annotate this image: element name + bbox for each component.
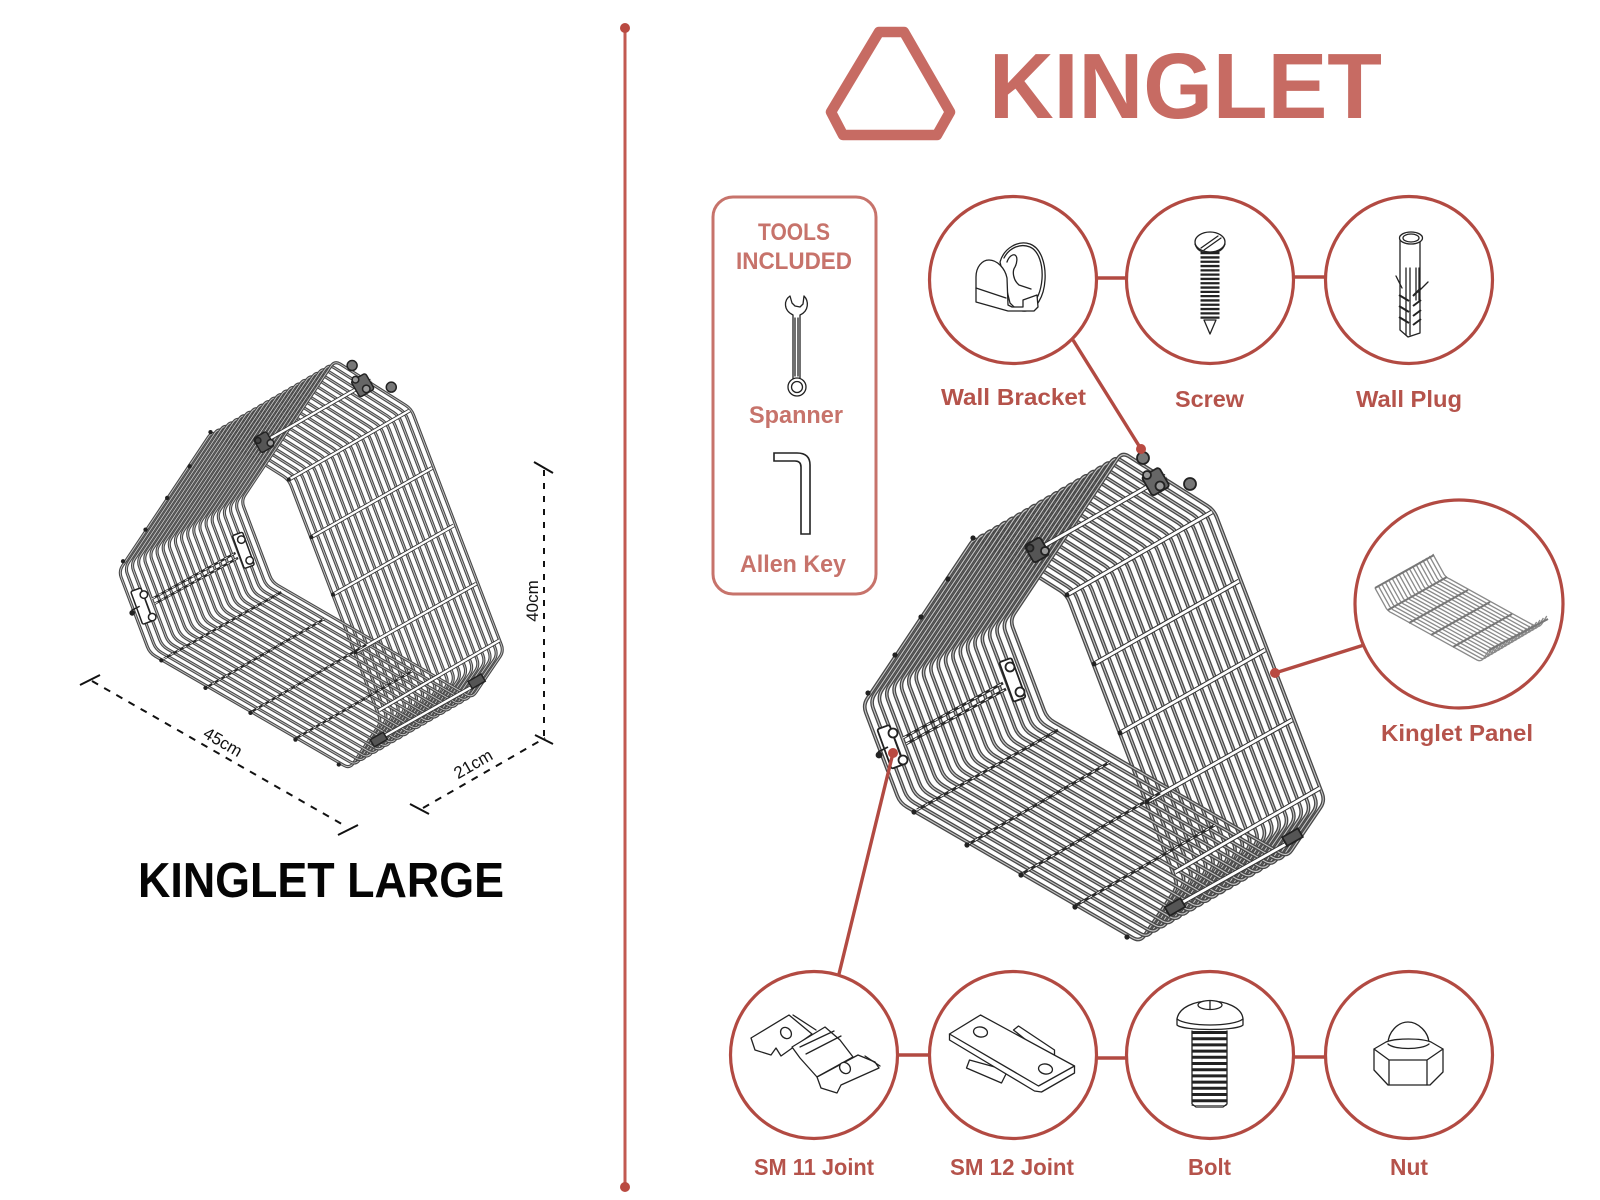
part: screw [1126, 196, 1294, 364]
icon: wall plug [1396, 232, 1428, 337]
dimension: 40cm [523, 462, 553, 736]
dimension: 21cm [410, 735, 553, 814]
dimension: 45cm: 45cm [200, 724, 246, 761]
links between bottom parts [898, 1055, 1325, 1058]
label: bolt: Bolt [1188, 1154, 1231, 1180]
label: nut: Nut [1390, 1154, 1428, 1180]
part: bolt [1126, 972, 1294, 1138]
vertical divider [620, 23, 630, 1192]
label: SM 11 joint: SM 11 Joint [754, 1154, 874, 1180]
icon: bolt [1177, 1000, 1243, 1107]
label: wall bracket: Wall Bracket [941, 384, 1086, 410]
label: screw: Screw [1175, 386, 1244, 412]
heading: Kinglet Large: KINGLET LARGE [138, 854, 504, 908]
dimension: 45cm [80, 675, 358, 835]
part: kinglet panel [1355, 500, 1563, 708]
wire cage drawing, small [120, 361, 502, 767]
icon: kinglet panel [1375, 554, 1548, 661]
tools heading [736, 219, 852, 275]
tools heading: TOOLS [758, 219, 830, 246]
tools heading: INCLUDED [736, 248, 852, 275]
icon: SM 11 joint [751, 1015, 880, 1093]
part: nut [1326, 972, 1492, 1138]
dimension: 21cm: 21cm [450, 746, 496, 783]
part: SM 12 joint [930, 972, 1096, 1138]
icon: screw [1195, 232, 1225, 334]
connector: wall bracket to cage [1073, 340, 1146, 454]
icon: spanner [785, 296, 807, 396]
label: allen key: Allen Key [740, 551, 847, 578]
panel: tools included [713, 197, 876, 594]
logo mark [831, 32, 950, 135]
icon: nut [1374, 1022, 1443, 1085]
icon: SM 12 joint [950, 1015, 1074, 1092]
label: wall plug: Wall Plug [1356, 386, 1462, 412]
left panel: Kinglet Large dimensions [80, 361, 553, 908]
icon: allen key [774, 453, 810, 534]
label: spanner: Spanner [749, 402, 843, 429]
brand name: KINGLET [989, 34, 1382, 138]
connector: panel to cage [1270, 645, 1364, 678]
label: kinglet panel: Kinglet Panel [1381, 720, 1533, 746]
part: wall plug [1326, 196, 1492, 364]
part: wall bracket [930, 196, 1096, 364]
dimension: 40cm: 40cm [523, 580, 542, 622]
label: SM 12 joint: SM 12 Joint [950, 1154, 1074, 1180]
connector: SM 11 joint to cage [838, 748, 898, 978]
icon: wall bracket [976, 243, 1045, 311]
large wire cage assembly drawing [865, 452, 1323, 940]
part: SM 11 joint [730, 972, 898, 1138]
links between top parts [1097, 277, 1325, 278]
